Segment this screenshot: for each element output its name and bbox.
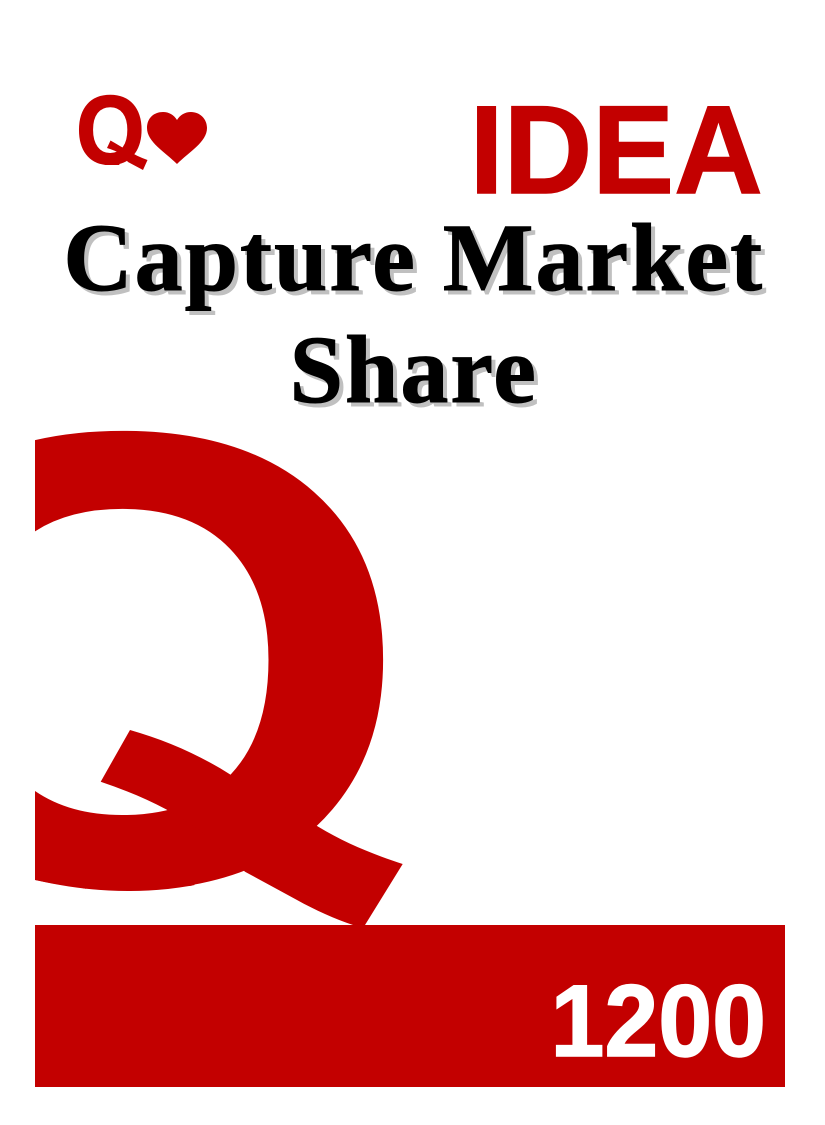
logo: Q with heart: [79, 94, 207, 170]
title: Capture Market: [63, 204, 764, 311]
title: Share: [290, 316, 538, 423]
title: [63, 204, 768, 427]
logo: Q with heart: Q: [76, 76, 145, 185]
title: Share: [294, 320, 542, 427]
bottom red band: [35, 925, 785, 1087]
title: Capture Market: [67, 208, 768, 315]
icon: heart: [147, 112, 207, 164]
large Q graphic: [35, 430, 403, 925]
brand word: IDEA: IDEA: [470, 81, 763, 220]
number: 1200: 1200: [550, 965, 766, 1079]
